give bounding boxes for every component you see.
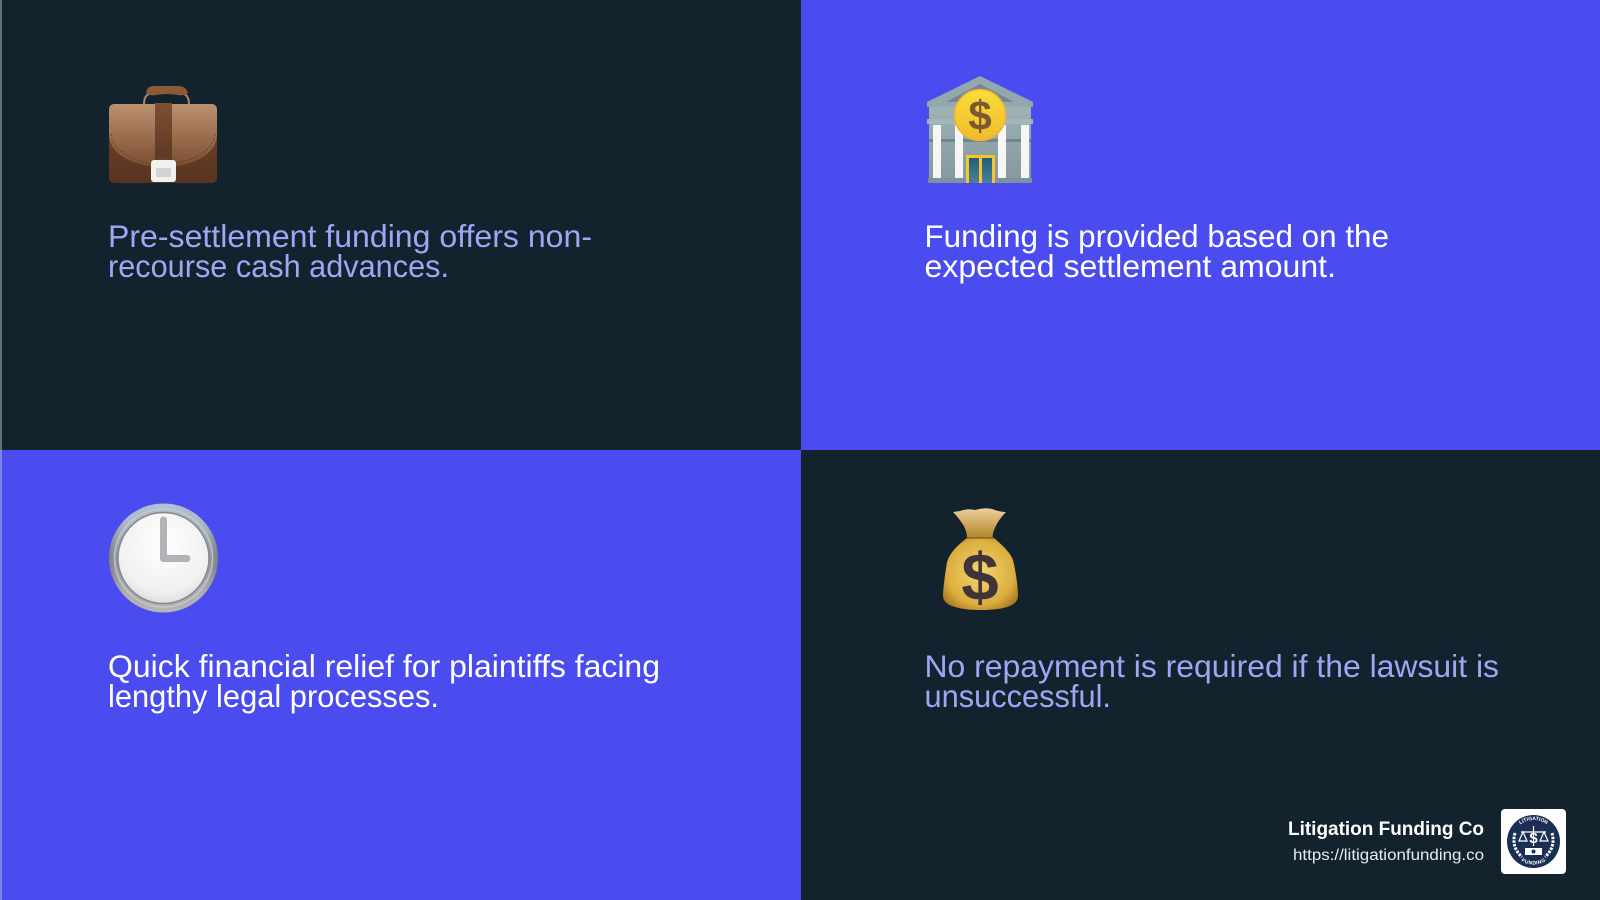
icon: money bag: $ [961,540,999,615]
panel: top right [801,0,1600,450]
left edge strip [0,0,2,900]
icon: company logo: LITIGATION [1518,816,1548,824]
text: pre-settlement funding [108,218,592,284]
footer: brand [1288,809,1566,874]
icon: briefcase [109,86,217,183]
icon: company logo: FUNDING [1522,858,1546,865]
icon: company logo: $ [1529,830,1538,847]
panel: bottom left [0,450,801,900]
text: funding based on settlement [924,218,1389,284]
text: quick financial relief: Quick financial relief for plaintiffs facing [108,648,660,684]
text: quick financial relief [108,648,660,714]
icon: bank [927,76,1033,183]
text: pre-settlement funding: Pre-settlement funding offers non- [108,218,592,254]
icon: bank: $ [968,92,992,139]
icon: company logo [1501,809,1566,874]
text: funding based on settlement: expected settlement amount. [924,248,1336,284]
panel: top left [0,0,801,450]
panel: bottom right [924,508,1566,874]
text: no repayment: unsuccessful. [924,678,1111,714]
text: no repayment [924,648,1499,714]
icon: money bag [943,508,1018,615]
text: no repayment: No repayment is required if the lawsuit is [924,648,1499,684]
text: company name: Litigation Funding Co [1288,818,1484,840]
icon: clock [109,504,218,612]
text: funding based on settlement: Funding is provided based on the [924,218,1389,254]
text: quick financial relief: lengthy legal processes. [108,678,439,714]
text: company url: https://litigationfunding.co [1293,847,1484,864]
text: pre-settlement funding: recourse cash advances. [108,248,449,284]
